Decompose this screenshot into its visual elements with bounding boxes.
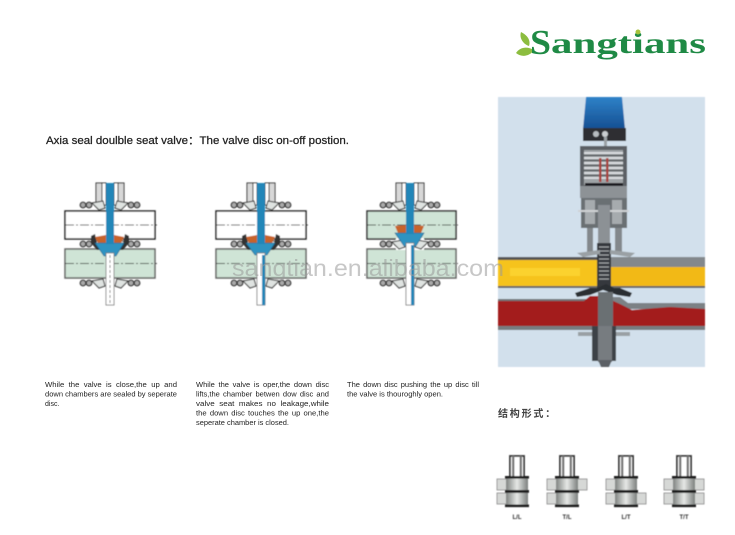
- icon: T/T configuration: [664, 456, 704, 521]
- actuator: spring housing: [580, 146, 627, 186]
- caption: lifting state: the down disc touches the up one,the: [196, 410, 329, 418]
- caption: lifting state: lifts,the chamber betwen dow disc and: [196, 392, 329, 398]
- actuator: lower housing: [578, 186, 629, 252]
- caption: open state: [347, 382, 479, 398]
- heading: structure types: 结构形式：: [498, 407, 557, 420]
- icon: L/L configuration: [497, 456, 529, 521]
- pipe: yellow: [498, 257, 705, 288]
- label: L/T: [622, 515, 631, 521]
- actuator: blue cap: [583, 97, 625, 129]
- valve diagram: closed: [65, 183, 157, 305]
- photo: cutaway valve render: [498, 97, 705, 367]
- icon: T/L configuration: [547, 456, 587, 521]
- valve diagram: open: [367, 183, 458, 305]
- valve diagram: lifting: [216, 183, 308, 305]
- logo wordmark: [530, 23, 706, 62]
- icon: L/T configuration: [606, 456, 646, 521]
- watermark: sangtian.en.alibaba.com: [232, 255, 504, 281]
- caption: open state: the valve is thouroghly open.: [347, 392, 443, 398]
- caption: closed state: [45, 382, 177, 408]
- label: L/L: [512, 515, 522, 521]
- label: T/T: [680, 515, 689, 521]
- title: Axia seal doulble seat valve：The valve disc on-off postion.: [46, 135, 349, 147]
- caption: lifting state: While the valve is oper,the down disc: [196, 382, 330, 389]
- caption: closed state: While the valve is close,the up and: [45, 382, 177, 389]
- logo wordmark: S: [530, 23, 551, 62]
- caption: lifting state: valve seat makes no leakage,while: [196, 401, 329, 408]
- valve stem and spring: [577, 205, 635, 289]
- valve seat clamp: [575, 284, 632, 367]
- logo wordmark: angtians: [551, 27, 706, 60]
- caption: open state: The down disc pushing the up disc till: [347, 382, 479, 389]
- pipe: red: [498, 296, 705, 330]
- icon: green leaves: [516, 32, 534, 56]
- caption: closed state: down chambers are sealed by seperate: [45, 392, 177, 398]
- caption: lifting state: [196, 382, 330, 427]
- label: T/L: [562, 515, 572, 521]
- caption: closed state: disc.: [45, 401, 59, 408]
- logo: Sangtians: [516, 23, 706, 62]
- caption: lifting state: seperate chamber is closed.: [196, 420, 289, 427]
